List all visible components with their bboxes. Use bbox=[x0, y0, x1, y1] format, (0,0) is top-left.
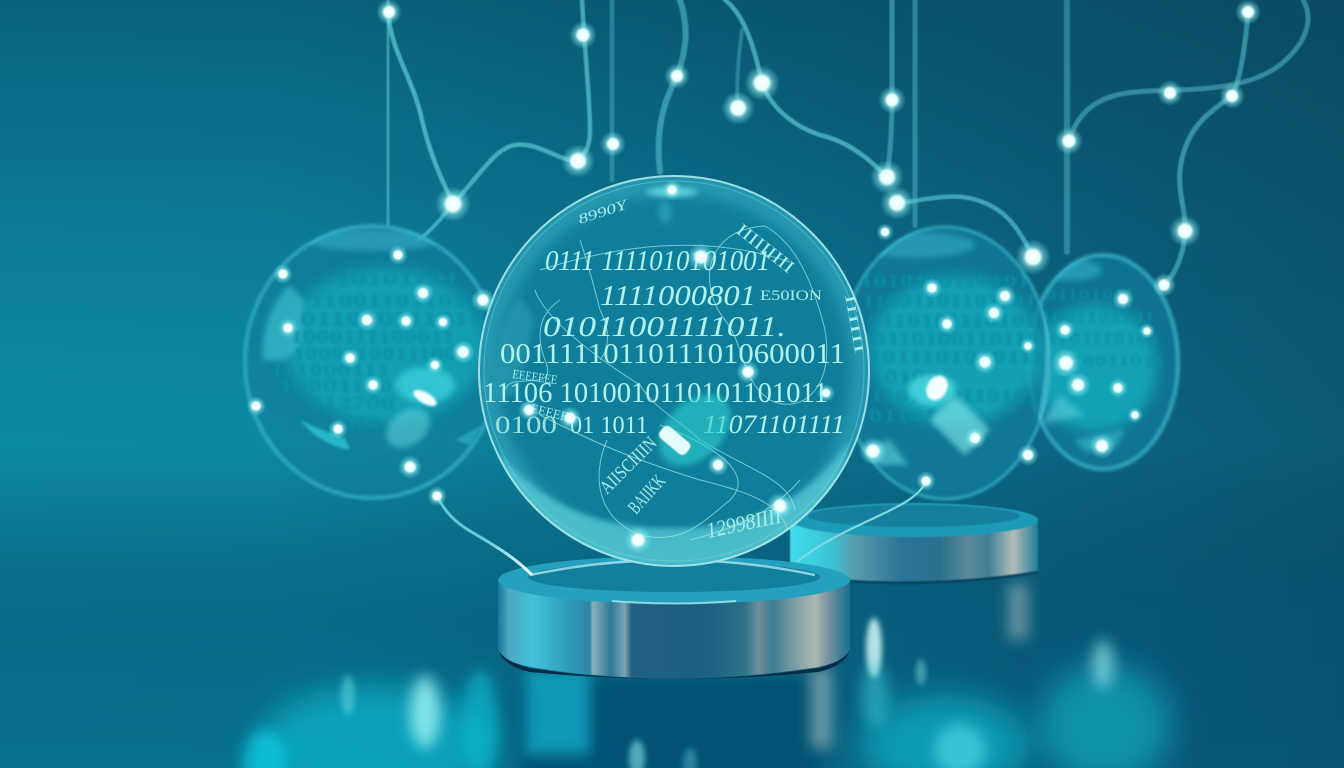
left sphere: 110011011011 bbox=[310, 291, 480, 312]
right sphere bbox=[839, 226, 1051, 500]
right sphere: 10100 bbox=[870, 367, 940, 388]
left sphere: 10101101 bbox=[335, 269, 460, 290]
right sphere: 11001101101101 bbox=[862, 291, 1037, 312]
left sphere bbox=[244, 225, 500, 499]
left sphere: 011010111010 bbox=[300, 309, 485, 330]
far right sphere: 01101110101 bbox=[1035, 329, 1160, 348]
light bulb: IIIIII bbox=[842, 293, 867, 355]
right sphere: 1101100110101 bbox=[870, 386, 1040, 407]
binary digits: 00111110110111010600011 bbox=[500, 339, 845, 370]
binary digits bbox=[483, 246, 845, 439]
left sphere: 112700 bbox=[310, 393, 395, 414]
right sphere: 01101 bbox=[868, 406, 938, 427]
light bulb: E50ION bbox=[760, 288, 822, 304]
left sphere: 100 bbox=[345, 414, 380, 435]
far right sphere: 1001101101 bbox=[1040, 307, 1155, 326]
floor reflections bbox=[243, 584, 1170, 768]
left sphere: 1000110011100 bbox=[292, 344, 457, 365]
second metal base bbox=[790, 503, 1038, 583]
light bulb: IIIIIIIII bbox=[733, 219, 798, 277]
binary digits: 01 1011 bbox=[570, 412, 648, 439]
right sphere: 11011101010111 bbox=[855, 347, 1045, 368]
hanging light wires bbox=[388, 0, 1308, 285]
right sphere: 1010110110101 bbox=[860, 271, 1030, 292]
left sphere: 1000111100011 bbox=[290, 327, 455, 348]
binary digits: 0100 bbox=[495, 412, 557, 439]
central metal base bbox=[498, 556, 850, 679]
binary digits: 11071101111 bbox=[703, 410, 845, 439]
world map outline lines bbox=[505, 226, 827, 540]
light bulb: EEEEEEE bbox=[512, 366, 558, 387]
right sphere: 10110100110110 bbox=[860, 329, 1040, 350]
sphere rim bbox=[479, 176, 869, 566]
central glass sphere bbox=[478, 175, 870, 567]
far right sphere: 11010011011 bbox=[1035, 351, 1165, 370]
glowing light nodes bbox=[246, 0, 1261, 554]
far right sphere: 01101011 bbox=[1045, 285, 1135, 304]
right sphere: 0110101110101 bbox=[868, 311, 1038, 332]
light bulb: 8990Y bbox=[577, 197, 632, 228]
sphere lens shading bbox=[486, 183, 862, 567]
far right sphere bbox=[1027, 254, 1179, 470]
connector wires to bases bbox=[437, 481, 926, 574]
light bulb: 12998IIII bbox=[704, 502, 785, 543]
binary digits: 11106 1010010110101101011 bbox=[483, 378, 828, 409]
left sphere: 111000111 bbox=[270, 360, 390, 381]
light bulb bbox=[512, 197, 867, 543]
light bulb: EEEEE bbox=[529, 400, 570, 424]
binary digits: 0111 1111010101001 bbox=[545, 246, 770, 277]
left sphere: 100011101 bbox=[278, 376, 408, 397]
light bulb: BAIIKK bbox=[624, 471, 670, 518]
binary digits: 01011001111011. bbox=[543, 311, 786, 343]
binary digits: 1111000801 bbox=[600, 281, 756, 312]
light bulb: AIISCIIIIN bbox=[596, 433, 662, 499]
